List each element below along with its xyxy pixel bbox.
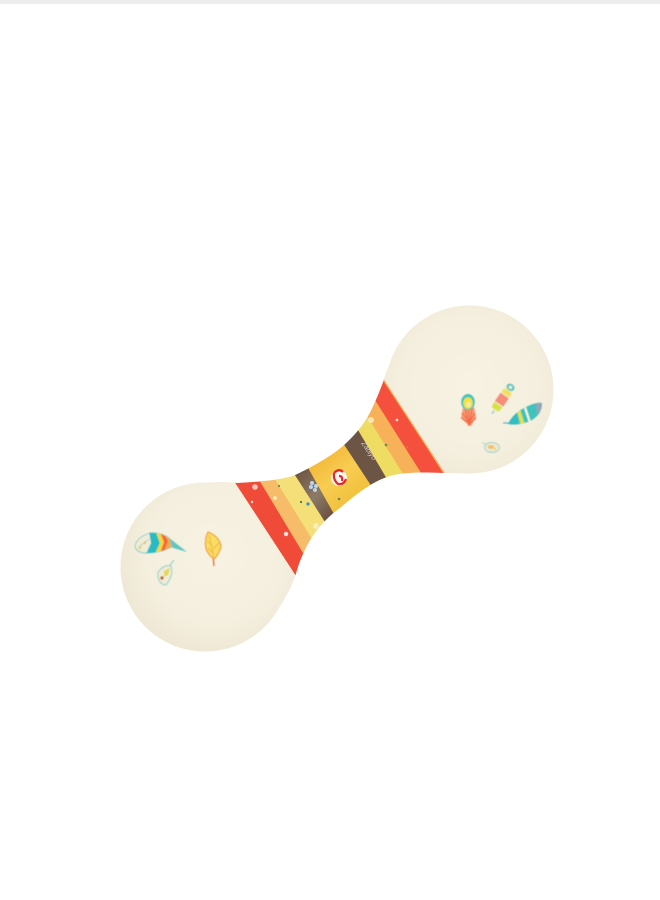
left brown band bbox=[295, 468, 334, 522]
top grey strip bbox=[0, 0, 660, 4]
icon: right ball striped feather bbox=[488, 382, 517, 416]
right red band orange edge bbox=[384, 381, 444, 473]
icon: left ball large feather bbox=[135, 532, 187, 554]
product illustration: maraca rattle bbox=[120, 306, 554, 652]
right red band bbox=[375, 380, 445, 476]
right yellow band bbox=[358, 417, 403, 478]
logo: red emblem bbox=[331, 470, 347, 486]
decorative dots on neck bbox=[251, 417, 408, 536]
center yellow band bbox=[307, 442, 373, 514]
icon: right ball peacock feather bbox=[461, 394, 476, 426]
right brown band bbox=[344, 430, 386, 485]
body: two cream balls and neck bbox=[120, 306, 554, 652]
left red band bbox=[232, 478, 304, 576]
neck stripe bands bbox=[232, 380, 445, 576]
icon: right ball teal feather bbox=[502, 402, 543, 426]
icon: left ball orange leaf bbox=[205, 532, 221, 566]
icon: snowflake emblem on left brown band bbox=[309, 481, 318, 492]
right orange band bbox=[368, 401, 421, 474]
left orange band bbox=[260, 480, 312, 553]
brand text on brown band: Zabiyo bbox=[359, 440, 377, 462]
left yellow band bbox=[276, 475, 324, 538]
icon: left ball small leaf bbox=[158, 560, 174, 585]
icon: right ball small feather bbox=[482, 442, 500, 452]
